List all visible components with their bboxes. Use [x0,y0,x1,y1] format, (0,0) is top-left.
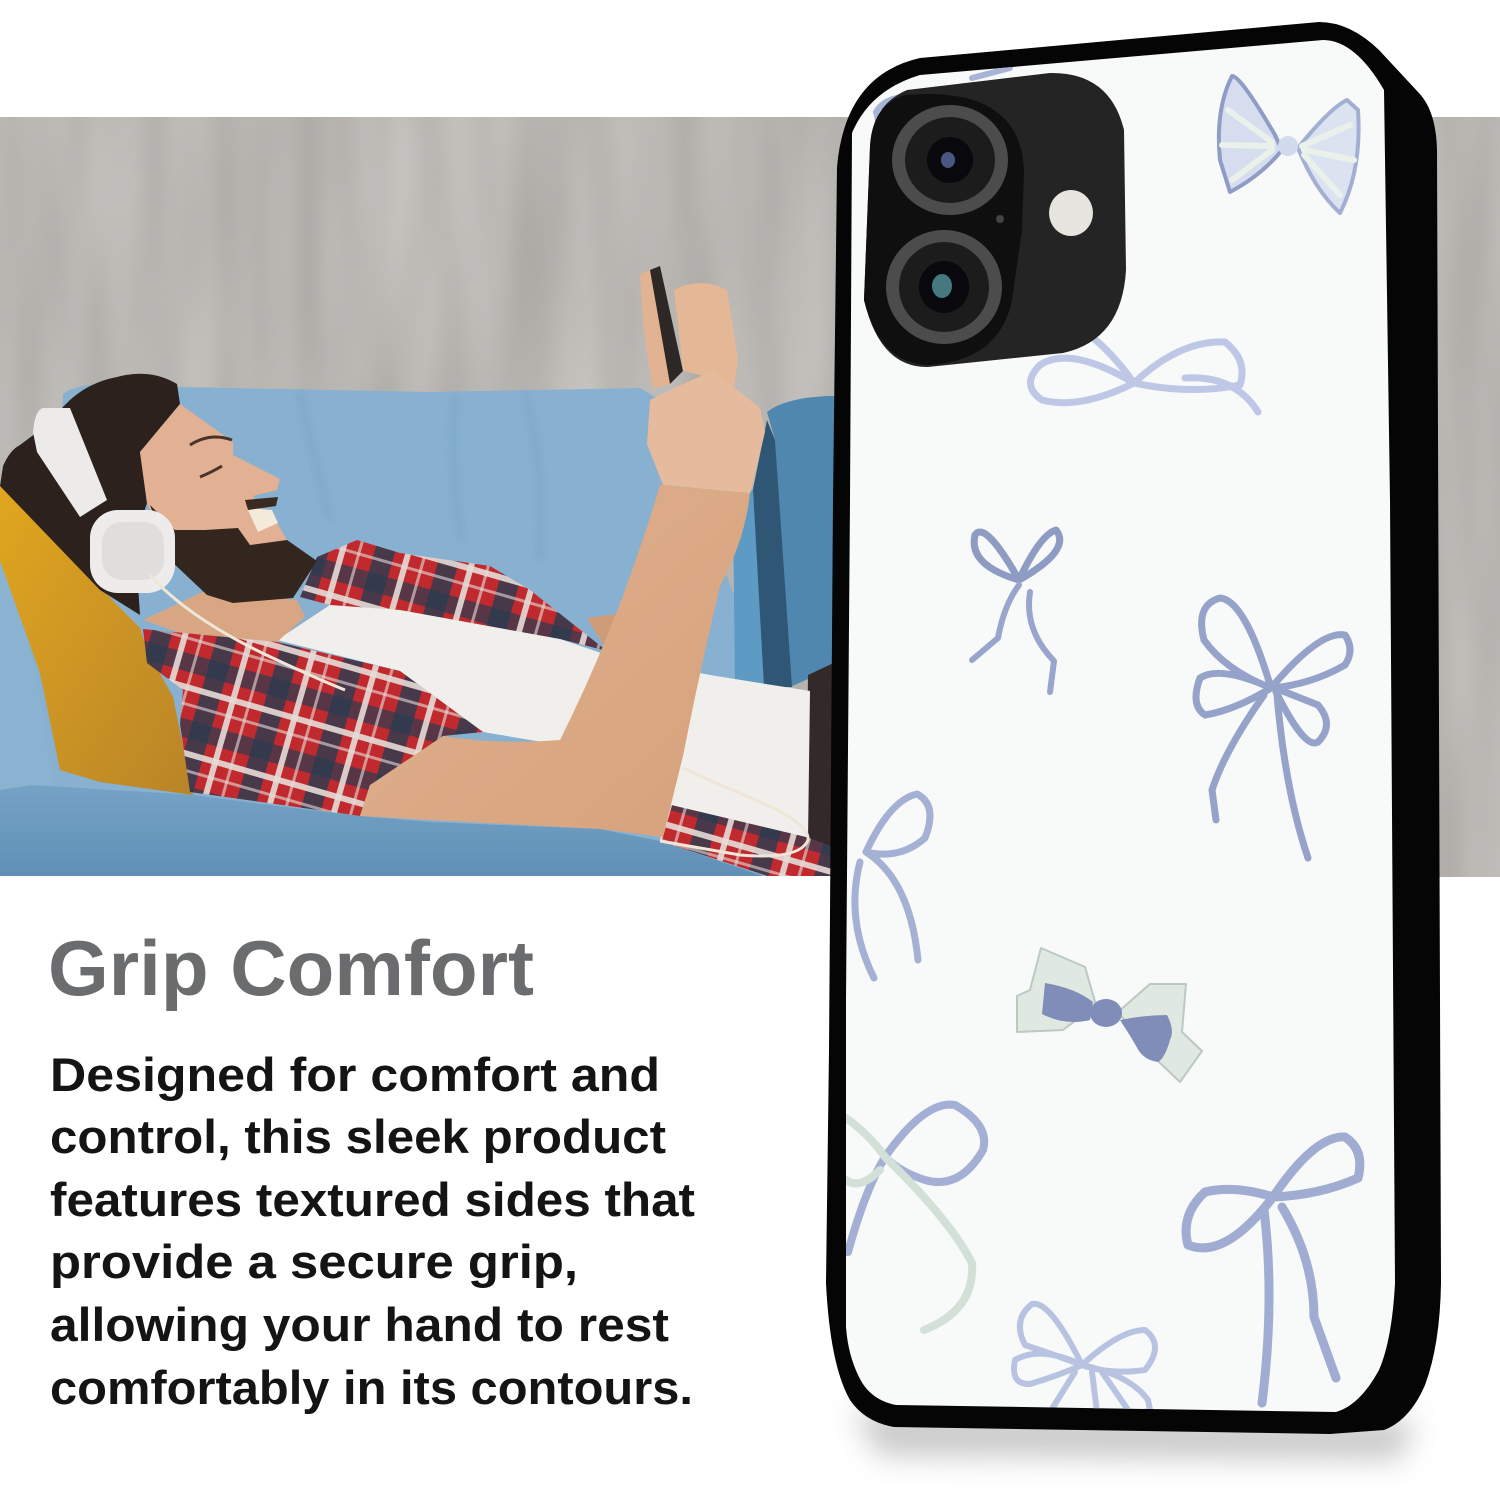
neck [143,590,305,642]
cable [150,575,808,856]
microphone dot [996,215,1004,223]
upper lens [892,105,1008,215]
sofa side panel [734,489,764,684]
bow: top centre [1030,335,1258,412]
body text: Designed for comfort and [50,1048,660,1101]
bow: lower left [846,1105,984,1330]
man's hair [0,374,180,615]
yellow pillow [0,486,193,795]
near arm [360,485,750,837]
sofa arm [767,396,840,687]
smartphone [650,266,683,384]
phone back design [846,40,1395,1420]
plaid collar [300,540,607,651]
earcup [90,510,175,593]
phone case [826,22,1441,1434]
man's brow and eye [190,437,232,477]
lower lens [886,230,1002,344]
bow: small navy thin [974,530,1060,580]
bow: green navy centre [1017,948,1202,1082]
photo: man relaxing on a sofa with a phone [0,117,860,880]
camera module [864,73,1126,367]
jeans [808,664,832,846]
body text: control, this sleek product [50,1110,666,1163]
phone drop shadow [852,1410,1415,1460]
sofa left cushion [0,561,52,792]
body text: features textured sides that [50,1173,695,1226]
bow: bottom centre [1014,1304,1155,1420]
far arm [587,482,665,645]
hand left finger [640,270,672,388]
sofa arm shadow [753,420,792,687]
earcup panel [102,522,164,580]
white t-shirt [277,602,810,840]
man's smile [247,508,278,532]
right gray wall band [1432,117,1500,877]
sofa seat [0,785,775,880]
flash [1049,190,1093,236]
heading: Grip Comfort [48,924,534,1012]
sofa cushion folds [524,390,528,391]
body text: comfortably in its contours. [50,1361,693,1414]
bow: striped top right [1219,76,1359,213]
body text [50,1048,695,1414]
bow stripes [1222,110,1354,195]
bow: small tails [972,585,1054,692]
bow: left middle [855,794,930,978]
lens housing [864,94,1024,365]
plaid shirt [143,629,483,816]
bow: lower right [1186,1137,1360,1403]
lower shirt hem [660,805,830,876]
fist [647,371,765,493]
headphones [33,408,808,856]
man's face [140,404,287,545]
bow: large right [1196,598,1350,858]
headband [33,408,107,517]
man's moustache [245,497,278,510]
concrete wall [0,117,848,691]
body text: allowing your hand to rest [50,1298,669,1351]
bow: top left fragment [876,68,1010,128]
upper hand [674,283,738,396]
man's beard [150,505,317,603]
body text: provide a secure grip, [50,1235,578,1288]
bow pattern [846,68,1360,1420]
sofa back [0,384,775,880]
